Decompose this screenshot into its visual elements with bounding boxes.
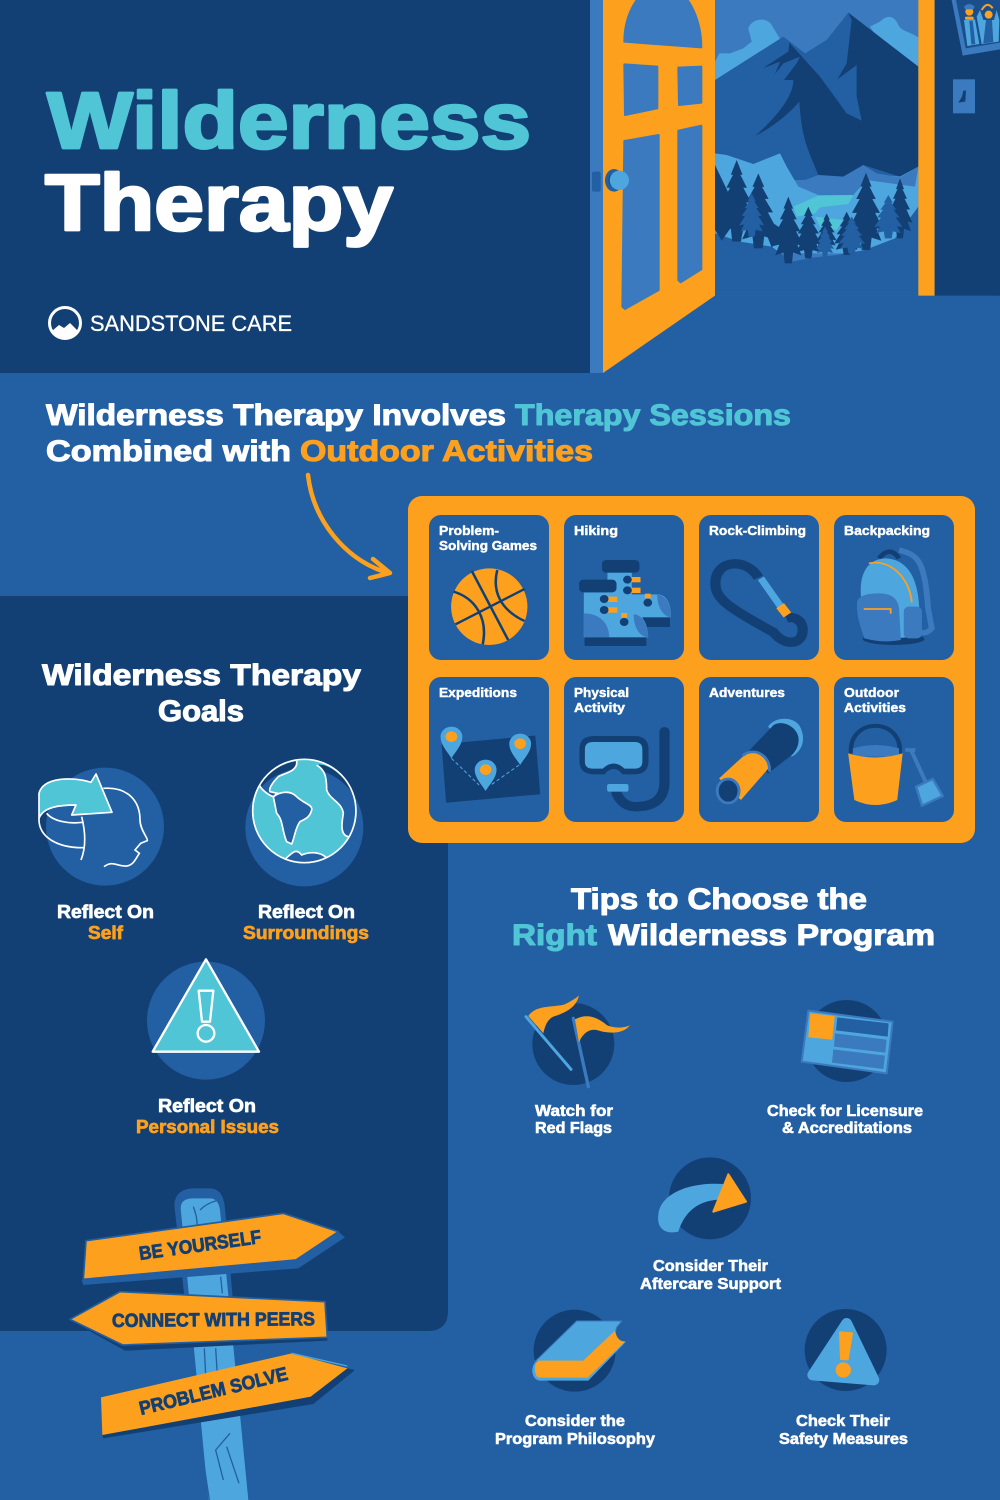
goal labels: Reflect On bbox=[158, 1096, 256, 1116]
icon: backpack bbox=[857, 550, 932, 645]
heading: therapy sessions combined with outdoor activities: Outdoor Activities bbox=[300, 435, 593, 468]
picture frame bbox=[952, 0, 1000, 56]
sign: be yourself board bbox=[82, 1213, 345, 1285]
heading: therapy sessions combined with outdoor activities: Combined with bbox=[46, 435, 291, 468]
heading: therapy sessions combined with outdoor activities: Wilderness Therapy Involves bbox=[46, 399, 506, 432]
tip icons row one bbox=[526, 995, 893, 1239]
card labels: Problem- bbox=[439, 523, 499, 538]
icon: map with pins bbox=[441, 727, 539, 802]
heading: tips: Tips to Choose the bbox=[571, 883, 867, 916]
goal labels: Self bbox=[88, 923, 124, 943]
heading: therapy sessions combined with outdoor activities bbox=[46, 399, 791, 468]
card labels: Hiking bbox=[574, 523, 618, 538]
signpost bbox=[68, 1188, 355, 1500]
card labels: Activities bbox=[844, 700, 906, 715]
goal labels: Surroundings bbox=[243, 923, 369, 943]
icon: snorkel mask bbox=[579, 732, 665, 807]
icon: head with arrow bbox=[39, 768, 164, 886]
panel: header background bbox=[0, 0, 590, 373]
logo: Sandstone Care: SANDSTONE CARE bbox=[90, 311, 292, 336]
title: Wilderness bbox=[47, 76, 531, 165]
icon: license card bbox=[802, 1000, 893, 1082]
tip labels row two: Consider the bbox=[525, 1413, 625, 1430]
heading: goals: Wilderness Therapy bbox=[42, 659, 361, 692]
illustration: open door with mountain view bbox=[590, 0, 1000, 373]
card labels: Activity bbox=[574, 700, 626, 715]
card labels: Solving Games bbox=[439, 538, 537, 553]
door leaf bbox=[603, 0, 715, 373]
goal labels: Personal Issues bbox=[136, 1117, 279, 1137]
door panes bbox=[622, 1, 701, 309]
tip labels row two: Safety Measures bbox=[779, 1431, 908, 1448]
sign: connect with peers board bbox=[68, 1292, 327, 1351]
tip labels row one: & Accreditations bbox=[782, 1120, 912, 1137]
activity icons bbox=[441, 550, 943, 807]
sign: problem solve board bbox=[101, 1353, 355, 1438]
light switch bbox=[953, 79, 975, 113]
icon: telescope bbox=[717, 719, 803, 803]
door frame bbox=[590, 0, 603, 373]
right door frame bbox=[918, 0, 935, 296]
tip labels row one: Aftercare Support bbox=[640, 1276, 782, 1293]
card labels bbox=[439, 523, 930, 715]
icon: aftercare arrow bbox=[658, 1157, 751, 1239]
tip labels row one: Red Flags bbox=[535, 1120, 612, 1137]
goal labels: Reflect On bbox=[258, 902, 355, 922]
mountain scene bbox=[715, 0, 918, 296]
icon: globe bbox=[245, 759, 363, 886]
icon: book bbox=[532, 1310, 626, 1392]
card labels: Rock-Climbing bbox=[709, 523, 806, 538]
icon: flags bbox=[526, 995, 630, 1087]
tip labels row two: Program Philosophy bbox=[495, 1431, 655, 1448]
tip labels row one: Consider Their bbox=[653, 1258, 768, 1275]
tip icons row two bbox=[532, 1309, 887, 1392]
icon: hiking boots bbox=[579, 560, 671, 646]
icon: safety warning bbox=[805, 1309, 887, 1391]
door knob bbox=[592, 169, 629, 192]
signpost: CONNECT WITH PEERS bbox=[112, 1309, 315, 1332]
heading: goals bbox=[42, 659, 361, 728]
post bbox=[174, 1188, 250, 1500]
goal icons bbox=[39, 759, 363, 1080]
heading: tips: Wilderness Program bbox=[608, 919, 935, 952]
sign text: BE YOURSELF bbox=[138, 1227, 262, 1265]
card labels: Outdoor bbox=[844, 685, 899, 700]
tip labels row one: Check for Licensure bbox=[767, 1103, 923, 1120]
card labels: Backpacking bbox=[844, 523, 930, 538]
tip labels row two: Check Their bbox=[796, 1413, 890, 1430]
panel: activities bbox=[408, 496, 975, 843]
tip labels row two bbox=[495, 1413, 908, 1448]
panel: goals background bbox=[0, 596, 448, 1331]
heading: therapy sessions combined with outdoor activities: Therapy Sessions bbox=[515, 399, 791, 432]
tip labels row one bbox=[535, 1103, 923, 1293]
card backgrounds bbox=[429, 515, 954, 822]
card labels: Physical bbox=[574, 685, 629, 700]
card labels: Adventures bbox=[709, 685, 785, 700]
arrow bbox=[308, 475, 390, 578]
wall bbox=[935, 0, 1000, 296]
card labels: Expeditions bbox=[439, 685, 517, 700]
title bbox=[45, 76, 531, 247]
logo: Sandstone Care bbox=[50, 308, 292, 339]
icon: basketball bbox=[451, 568, 527, 645]
tip labels row one: Watch for bbox=[535, 1103, 613, 1120]
goal labels: Reflect On bbox=[57, 902, 154, 922]
heading: tips bbox=[512, 883, 935, 952]
icon: carabiner bbox=[715, 564, 803, 642]
signpost: PROBLEM SOLVE bbox=[137, 1364, 290, 1420]
heading: tips: Right bbox=[512, 919, 597, 952]
icon: bucket and shovel bbox=[848, 726, 943, 806]
goal labels bbox=[57, 902, 369, 1137]
heading: goals: Goals bbox=[158, 695, 244, 728]
title: Therapy bbox=[45, 158, 394, 247]
icon: warning triangle bbox=[147, 959, 265, 1080]
